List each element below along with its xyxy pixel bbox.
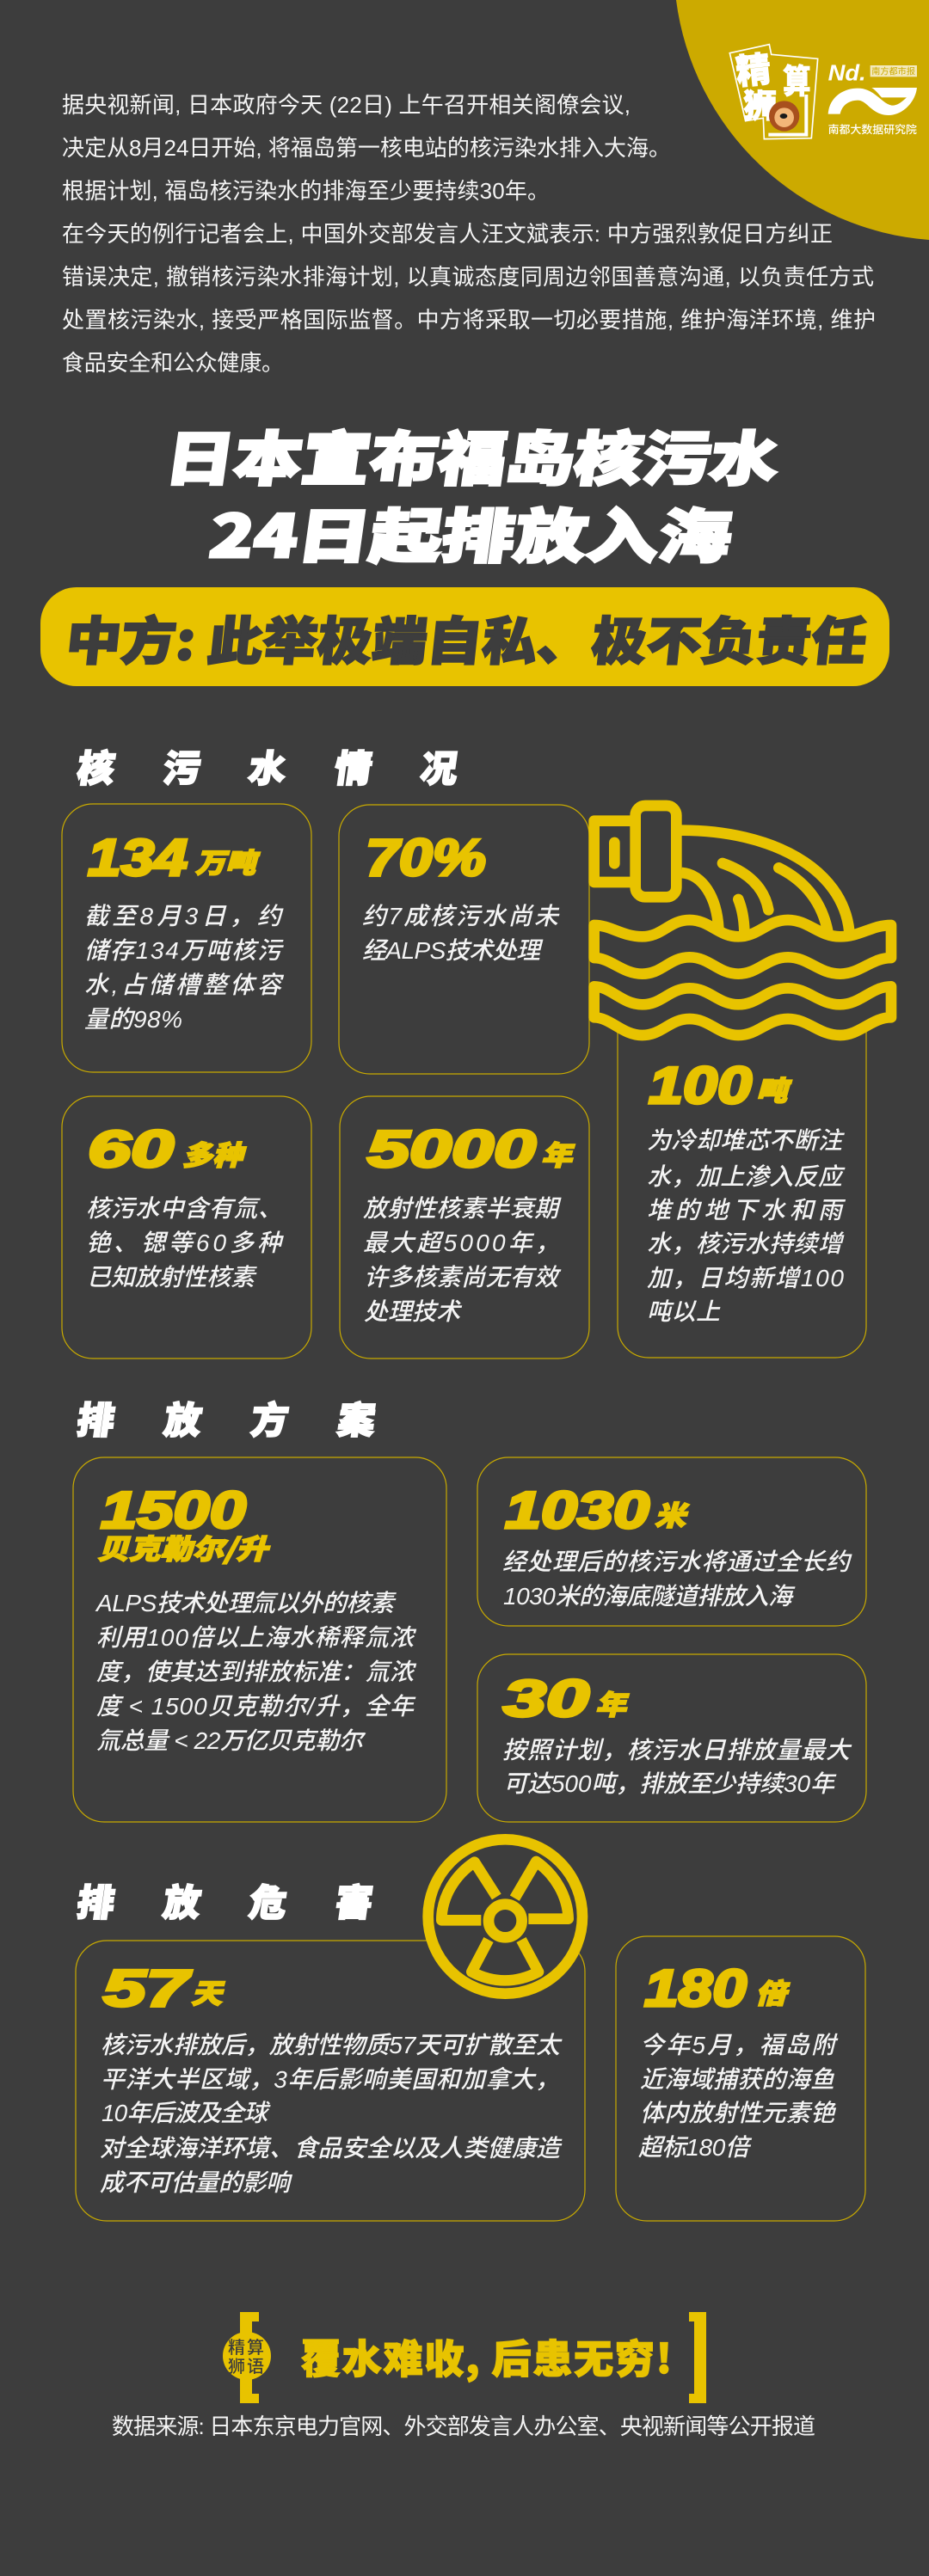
- panel: 100吨: [618, 1027, 866, 1358]
- right bracket: [689, 2312, 706, 2403]
- panel: 70%: 经ALPS技术处理: [362, 937, 544, 964]
- panel: 100吨: 加，日均新增100: [647, 1265, 844, 1291]
- badge: 精算狮语: 狮语: [228, 2352, 264, 2377]
- panel: 57天: 核污水排放后，放射性物质57天可扩散至太: [101, 2032, 563, 2058]
- logo: 精算狮: 精: [733, 40, 773, 95]
- panel: 1500贝克勒尔/升: 1500: [101, 1481, 246, 1539]
- panel: 70%: 约7成核污水尚未: [362, 903, 560, 929]
- subtitle pill: [40, 587, 889, 686]
- heading: 排放方案: 排放方案: [74, 1391, 379, 1444]
- panel: 134万吨: 万吨: [195, 842, 261, 881]
- panel: 1500贝克勒尔/升: ALPS技术处理氚以外的核素: [95, 1590, 397, 1616]
- panel: 1500贝克勒尔/升: 度 < 1500贝克勒尔/升，全年: [96, 1693, 416, 1720]
- panel: 60多种: 多种: [182, 1134, 246, 1174]
- badge: 精算狮语: 精算: [228, 2334, 264, 2358]
- intro text: 根据计划, 福岛核污染水的排海至少要持续30年。: [62, 178, 550, 204]
- panel: 1030米: 米: [655, 1494, 689, 1534]
- heading: 核污水情况: 核污水情况: [74, 739, 462, 793]
- panel: 60多种: 铯、锶等60多种: [86, 1230, 284, 1256]
- panel: 180倍: [616, 1936, 865, 2221]
- panel: 180倍: 体内放射性元素铯: [640, 2100, 837, 2126]
- logo: 精算狮: [729, 40, 818, 139]
- panel: 70%: [339, 805, 589, 1074]
- panel: 30年: 30: [503, 1670, 589, 1727]
- title: 日本宣布福岛核污水: [161, 412, 785, 497]
- heading: 排放危害: 排放危害: [74, 1874, 377, 1927]
- lion: [769, 101, 799, 132]
- panel: 30年: 按照计划，核污水日排放量最大: [502, 1737, 852, 1763]
- panel: 1500贝克勒尔/升: 利用100倍以上海水稀释氚浓: [96, 1624, 417, 1651]
- panel: 100吨: 为冷却堆芯不断注: [647, 1127, 845, 1154]
- panel: 60多种: 核污水中含有氚、: [86, 1195, 282, 1222]
- panel: 5000年: [340, 1096, 589, 1359]
- panel: 100吨: 吨: [756, 1070, 793, 1109]
- header corner with logos: [676, 0, 929, 240]
- panel: 180倍: 近海域捕获的海鱼: [640, 2066, 835, 2093]
- logo: 南都大数据研究院: [828, 59, 917, 137]
- icon: radiation symbol: [428, 1839, 582, 1994]
- panel: 57天: 10年后波及全球: [102, 2100, 271, 2126]
- title: 24日起排放入海: [205, 489, 738, 574]
- data source: 数据来源: 日本东京电力官网、外交部发言人办公室、央视新闻等公开报道: [112, 2413, 815, 2439]
- panel: 57天: 平洋大半区域，3年后影响美国和加拿大，: [101, 2066, 559, 2093]
- title: [161, 412, 785, 574]
- intro text: 食品安全和公众健康。: [62, 350, 284, 376]
- panel: 30年: 年: [595, 1684, 629, 1723]
- panel: 60多种: [62, 1096, 311, 1359]
- subtitle pill: 中方: 此举极端自私、极不负责任: [63, 600, 871, 675]
- panel: 30年: [477, 1654, 866, 1822]
- panel: 57天: [76, 1941, 585, 2221]
- panel: 30年: 可达500吨，排放至少持续30年: [503, 1770, 837, 1797]
- panel: 5000年: 年: [541, 1134, 575, 1174]
- intro text: 处置核污染水, 接受严格国际监督。中方将采取一切必要措施, 维护海洋环境, 维护: [62, 307, 876, 333]
- intro text: 决定从8月24日开始, 将福岛第一核电站的核污染水排入大海。: [62, 135, 671, 161]
- logo: 南都大数据研究院: 南方都市报: [871, 64, 915, 77]
- panel: 1500贝克勒尔/升: [73, 1457, 446, 1822]
- panel: 180倍: 超标180倍: [638, 2134, 753, 2161]
- panel: 1500贝克勒尔/升: 氚总量 < 22万亿贝克勒尔: [96, 1727, 366, 1754]
- panel: 1030米: 1030米的海底隧道排放入海: [503, 1583, 796, 1610]
- panel: 5000年: 放射性核素半衰期: [363, 1195, 562, 1222]
- panel: 1030米: [477, 1457, 866, 1626]
- panel: 180倍: 今年5月，福岛附: [640, 2032, 839, 2058]
- intro text: 在今天的例行记者会上, 中国外交部发言人汪文斌表示: 中方强烈敦促日方纠正: [62, 221, 833, 247]
- panel: 134万吨: 134: [88, 829, 188, 886]
- panel: 1500贝克勒尔/升: 贝克勒尔/升: [97, 1528, 270, 1567]
- panel: 134万吨: 截至8月3日，约: [84, 903, 284, 929]
- panel: 134万吨: [62, 804, 311, 1072]
- panel: 100吨: 吨以上: [647, 1298, 721, 1325]
- panel: 5000年: 许多核素尚无有效: [364, 1264, 562, 1291]
- icon: pipe discharging into waves: [594, 806, 891, 1035]
- panel: 134万吨: 水,占储槽整体容: [84, 972, 285, 998]
- panel: 100吨: 水，核污水持续增: [647, 1230, 845, 1257]
- panel: 134万吨: 储存134万吨核污: [84, 937, 284, 964]
- panel: 70%: 70%: [366, 829, 486, 886]
- panel: 57天: 天: [191, 1972, 225, 2012]
- logo: 南都大数据研究院: Nd.: [828, 59, 866, 85]
- panel: 60多种: 60: [88, 1120, 174, 1178]
- panel: 57天: 对全球海洋环境、食品安全以及人类健康造: [100, 2135, 563, 2162]
- left bracket: [240, 2312, 259, 2403]
- panel: 180倍: 180: [644, 1960, 747, 2017]
- panel: 1500贝克勒尔/升: 度，使其达到排放标准：氚浓: [96, 1659, 417, 1685]
- closing slogan: [223, 2312, 706, 2403]
- panel: 57天: 57: [103, 1960, 192, 2017]
- corner arc: [676, 0, 929, 240]
- panel: 100吨: 100: [649, 1057, 752, 1114]
- logo: 精算狮: 算: [783, 54, 811, 103]
- panel: 100吨: 水，加上渗入反应: [647, 1163, 846, 1190]
- panel: 100吨: 堆的地下水和雨: [647, 1197, 846, 1224]
- intro text: 据央视新闻, 日本政府今天 (22日) 上午召开相关阁僚会议,: [62, 92, 631, 118]
- panel: 60多种: 已知放射性核素: [87, 1264, 257, 1291]
- panel: 180倍: 倍: [755, 1972, 790, 2012]
- panel: 134万吨: 量的98%: [84, 1006, 182, 1033]
- panel: 1030米: 经处理后的核污水将通过全长约: [502, 1549, 852, 1575]
- slogan text: 覆水难收, 后患无穷!: [301, 2328, 672, 2385]
- panel: 1030米: 1030: [505, 1481, 649, 1539]
- logo: 南都大数据研究院: 南都大数据研究院: [828, 120, 917, 137]
- badge: 精算狮语: [223, 2332, 271, 2380]
- panel: 5000年: 5000: [367, 1120, 536, 1178]
- intro text: 错误决定, 撤销核污染水排海计划, 以真诚态度同周边邻国善意沟通, 以负责任方式: [62, 264, 874, 290]
- panel: 5000年: 处理技术: [364, 1298, 463, 1325]
- logo: 精算狮: 狮: [743, 80, 777, 128]
- panel: 5000年: 最大超5000年，: [363, 1230, 559, 1256]
- intro text: [62, 92, 876, 376]
- panel: 57天: 成不可估量的影响: [100, 2169, 293, 2196]
